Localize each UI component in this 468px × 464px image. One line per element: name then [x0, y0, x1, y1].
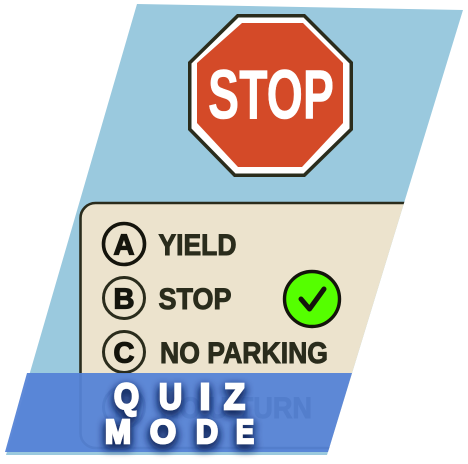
option C — [104, 332, 328, 372]
option B: STOP — [158, 283, 232, 316]
option C: C — [114, 338, 135, 370]
banner title: quiz mode: U — [159, 376, 182, 417]
panel: answer card — [79, 202, 404, 450]
banner title: quiz mode: M — [105, 413, 131, 450]
banner title: quiz mode — [105, 376, 254, 450]
option A — [104, 224, 236, 264]
banner title: quiz mode: D — [196, 413, 218, 450]
banner — [5, 373, 352, 452]
icon: green check mark — [284, 272, 340, 326]
option D: D — [114, 392, 134, 424]
option C: NO PARKING — [160, 337, 328, 370]
banner title: quiz mode: O — [150, 413, 176, 450]
banner title: quiz mode: Q — [114, 376, 139, 417]
stop sign word: STOP — [208, 56, 334, 134]
banner title: quiz mode: Z — [224, 376, 245, 417]
option A: A — [114, 230, 135, 262]
option D — [102, 389, 310, 422]
banner title: quiz mode: I — [200, 376, 210, 417]
icon: stop sign — [188, 14, 353, 177]
option B — [104, 278, 232, 318]
banner title: quiz mode: E — [236, 413, 254, 450]
option B: B — [114, 284, 134, 316]
option A: YIELD — [158, 229, 236, 262]
option D: NO U-TURN — [160, 392, 312, 425]
